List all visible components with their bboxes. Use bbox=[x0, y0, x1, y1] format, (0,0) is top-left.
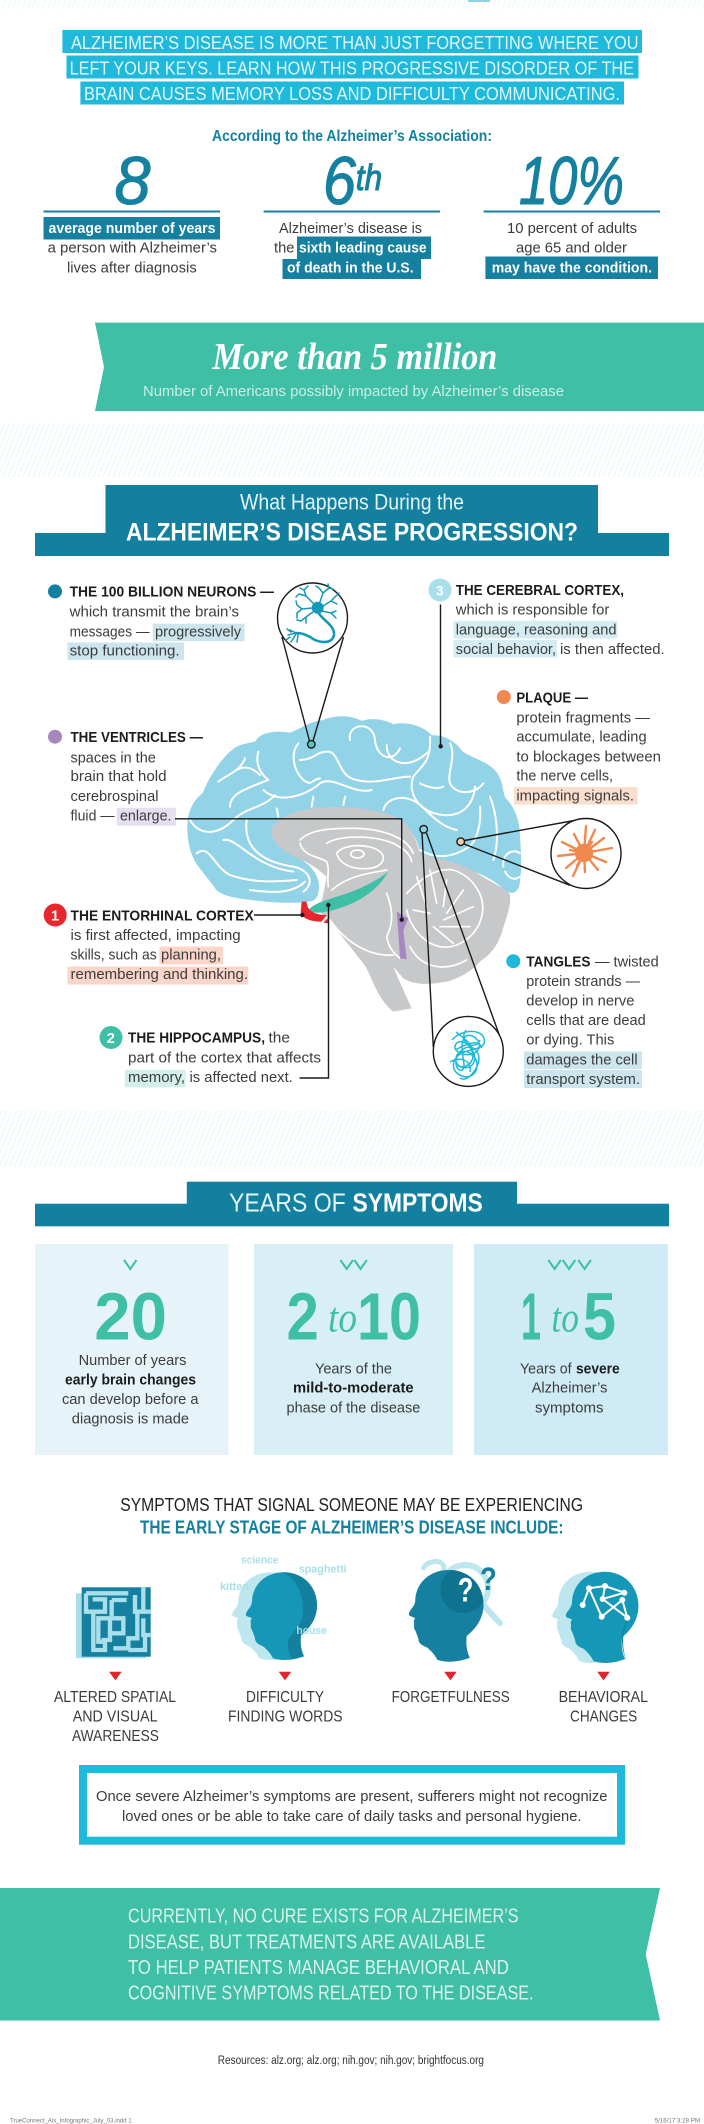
card: 1 to 5 years: symptoms bbox=[535, 1399, 604, 1416]
callout: neurons bbox=[48, 584, 274, 660]
stat: 10 percent: 10% bbox=[519, 143, 624, 219]
callout: cerebral cortex: 3 bbox=[436, 584, 444, 598]
callout: tangles: TANGLES bbox=[526, 954, 590, 970]
brain illustration bbox=[188, 717, 521, 1012]
callout: hippocampus: is affected next. bbox=[190, 1069, 293, 1086]
stat: 8 years: average number of years bbox=[48, 220, 216, 237]
callout: neurons: THE 100 BILLION NEURONS — bbox=[70, 584, 274, 601]
callout: hippocampus: the bbox=[268, 1030, 290, 1046]
callout: hippocampus: 2 bbox=[107, 1031, 115, 1047]
callout: entorhinal cortex bbox=[44, 904, 304, 984]
callout: plaque: protein fragments — bbox=[516, 709, 650, 726]
callout box: severe symptoms: loved ones or be able to take care of daily tasks and personal hygiene. bbox=[122, 1808, 582, 1825]
stat: 6th leading cause: 6 bbox=[323, 143, 361, 219]
callout: entorhinal cortex: planning, bbox=[161, 947, 221, 964]
icon: head with words: science bbox=[241, 1554, 278, 1566]
callout: plaque bbox=[497, 689, 661, 804]
stat: 6th leading cause: of death in the U.S. bbox=[287, 259, 414, 276]
symptom labels with red markers: AWARENESS bbox=[72, 1728, 159, 1745]
magnifier: neuron bbox=[278, 583, 348, 748]
icon: head with words bbox=[220, 1554, 347, 1660]
card: 2 to 10 years: mild-to-moderate bbox=[293, 1380, 414, 1397]
heading: years of symptoms: SYMPTOMS bbox=[352, 1190, 483, 1218]
heading: years of symptoms bbox=[35, 1182, 669, 1226]
callout: tangles: or dying. This bbox=[526, 1032, 614, 1048]
stat: 8 years: lives after diagnosis bbox=[67, 259, 197, 276]
intro text block bbox=[62, 30, 642, 104]
intro text block: ALZHEIMER’S DISEASE IS MORE THAN JUST FORGETTING WHERE YOU bbox=[71, 32, 638, 53]
stat: 6th leading cause bbox=[264, 143, 440, 279]
stat: 10 percent bbox=[484, 143, 660, 279]
severity chevrons bbox=[548, 1260, 591, 1269]
icon: head with question marks: ? bbox=[458, 1572, 473, 1610]
heading: early stage symptoms bbox=[120, 1495, 583, 1537]
callout: entorhinal cortex: 1 bbox=[51, 908, 59, 924]
heading: years of symptoms: YEARS OF bbox=[229, 1190, 346, 1218]
banner: no cure: TO HELP PATIENTS MANAGE BEHAVIORAL AND bbox=[128, 1957, 509, 1979]
stat: 6th leading cause: Alzheimer’s disease is bbox=[279, 220, 422, 237]
symptom labels with red markers: DIFFICULTY bbox=[246, 1689, 324, 1706]
banner: more than 5 million: More than 5 million bbox=[211, 336, 497, 378]
stat: 6th leading cause: the bbox=[274, 240, 294, 257]
banner: more than 5 million: Number of Americans possibly impacted by Alzheimer’s disease bbox=[143, 383, 564, 400]
callout box: severe symptoms: Once severe Alzheimer’s symptoms are present, sufferers might not recognize bbox=[96, 1788, 608, 1805]
callout: cerebral cortex bbox=[428, 578, 665, 748]
symptom labels with red markers: AND VISUAL bbox=[73, 1708, 158, 1726]
callout: neurons: progressively bbox=[155, 623, 241, 640]
icon: head with words: spaghetti bbox=[299, 1563, 347, 1575]
callout: tangles: damages the cell bbox=[526, 1052, 638, 1068]
callout: hippocampus bbox=[100, 903, 330, 1087]
symptom labels with red markers bbox=[54, 1672, 648, 1745]
stat: 6th leading cause: sixth leading cause bbox=[299, 240, 427, 257]
intro text block: LEFT YOUR KEYS. LEARN HOW THIS PROGRESSIVE DISORDER OF THE bbox=[70, 58, 634, 78]
resources line: Resources: alz.org; alz.org; nih.gov; nih.gov; brightfocus.org bbox=[218, 2055, 484, 2067]
callout: cerebral cortex: social behavior, bbox=[456, 641, 556, 658]
callout: plaque: to blockages between bbox=[516, 749, 661, 766]
callout: entorhinal cortex: skills, such as bbox=[70, 947, 157, 964]
callout: entorhinal cortex: THE ENTORHINAL CORTEX bbox=[70, 907, 254, 924]
card: 20 years: Number of years bbox=[79, 1352, 186, 1369]
callout: cerebral cortex: is then affected. bbox=[560, 641, 665, 658]
callout: neurons: stop functioning. bbox=[70, 642, 180, 660]
callout: tangles: develop in nerve bbox=[526, 993, 634, 1010]
callout: plaque: accumulate, leading bbox=[516, 729, 647, 746]
cerebellum and brain stem bbox=[270, 806, 510, 1012]
card: 1 to 5 years: severe bbox=[576, 1360, 620, 1377]
stat: 10 percent: 10 percent of adults bbox=[507, 220, 637, 237]
stat: 10 percent: age 65 and older bbox=[516, 240, 627, 257]
subheading: according to the association: According to the Alzheimer’s Association: bbox=[212, 128, 492, 145]
callout: ventricles: spaces in the bbox=[70, 749, 156, 766]
callout: plaque: PLAQUE — bbox=[516, 689, 588, 706]
callout: plaque: impacting signals. bbox=[516, 787, 634, 804]
callout: hippocampus: part of the cortex that affects bbox=[128, 1049, 321, 1066]
banner: no cure: DISEASE, BUT TREATMENTS ARE AVAILABLE bbox=[128, 1932, 485, 1954]
card: 1 to 5 years: to bbox=[551, 1296, 579, 1342]
card: 1 to 5 years: 1 bbox=[521, 1279, 541, 1354]
magnifier: tangles bbox=[420, 826, 503, 1086]
card: 20 years: early brain changes bbox=[65, 1371, 196, 1388]
stat: 10 percent: may have the condition. bbox=[492, 259, 652, 276]
severity chevrons bbox=[340, 1260, 367, 1269]
stat: 8 years: a person with Alzheimer’s bbox=[48, 240, 217, 257]
callout: hippocampus: memory, bbox=[128, 1069, 185, 1086]
symptom labels with red markers: ALTERED SPATIAL bbox=[54, 1689, 176, 1706]
banner: no cure: COGNITIVE SYMPTOMS RELATED TO THE DISEASE. bbox=[128, 1982, 534, 2004]
intro text block: BRAIN CAUSES MEMORY LOSS AND DIFFICULTY COMMUNICATING. bbox=[84, 83, 620, 104]
callout box: severe symptoms bbox=[83, 1769, 621, 1841]
heading: disease progression: What Happens During the bbox=[240, 489, 464, 514]
callout: ventricles: enlarge. bbox=[120, 807, 172, 824]
stat: 8 years bbox=[44, 143, 220, 276]
card: 2 to 10 years bbox=[254, 1244, 453, 1455]
callout: tangles: — twisted bbox=[595, 954, 659, 970]
hippocampus highlight bbox=[308, 872, 388, 913]
card: 2 to 10 years: 2 bbox=[286, 1279, 319, 1354]
callout: entorhinal cortex: is first affected, impacting bbox=[70, 927, 241, 944]
callout: tangles: cells that are dead bbox=[526, 1012, 646, 1029]
heading: early stage symptoms: THE EARLY STAGE OF ALZHEIMER’S DISEASE INCLUDE: bbox=[140, 1517, 564, 1537]
callout: ventricles: fluid — bbox=[70, 807, 114, 824]
card: 1 to 5 years: Years of bbox=[520, 1360, 572, 1377]
card: 1 to 5 years: 5 bbox=[583, 1279, 616, 1354]
callout: ventricles: cerebrospinal bbox=[70, 788, 158, 805]
ventricle highlight bbox=[397, 912, 408, 959]
card: 1 to 5 years: Alzheimer’s bbox=[532, 1380, 608, 1397]
stat: 8 years: 8 bbox=[114, 143, 151, 219]
card: 2 to 10 years: 10 bbox=[357, 1279, 421, 1354]
callout: tangles bbox=[506, 954, 659, 1088]
magnifier: plaque bbox=[457, 818, 621, 888]
card: 2 to 10 years: Years of the bbox=[315, 1360, 392, 1377]
callout: entorhinal cortex: remembering and thinking. bbox=[70, 966, 248, 983]
card: 20 years: diagnosis is made bbox=[72, 1410, 189, 1427]
callout: tangles: protein strands — bbox=[526, 973, 640, 990]
callout: hippocampus: THE HIPPOCAMPUS, bbox=[128, 1030, 265, 1046]
symptom labels with red markers: FORGETFULNESS bbox=[392, 1689, 510, 1706]
symptom labels with red markers: FINDING WORDS bbox=[228, 1708, 343, 1726]
cerebrum lobes bbox=[188, 717, 521, 902]
banner: more than 5 million bbox=[95, 323, 704, 411]
callout: plaque: the nerve cells, bbox=[516, 767, 613, 784]
card: 2 to 10 years: to bbox=[328, 1296, 357, 1342]
icon: head with words: kitten bbox=[220, 1581, 249, 1593]
heading: disease progression bbox=[35, 485, 669, 556]
card: 20 years: can develop before a bbox=[62, 1391, 199, 1408]
entorhinal cortex highlight bbox=[301, 902, 328, 923]
stat: 6th leading cause: th bbox=[356, 157, 382, 198]
banner: no cure: CURRENTLY, NO CURE EXISTS FOR ALZHEIMER’S bbox=[128, 1906, 519, 1928]
icon: maze bbox=[76, 1587, 151, 1658]
callout: ventricles bbox=[48, 729, 404, 922]
icon: head with question marks bbox=[409, 1561, 500, 1662]
callout: cerebral cortex: language, reasoning and bbox=[456, 621, 616, 638]
card: 20 years: 20 bbox=[94, 1279, 167, 1354]
card: 20 years bbox=[35, 1244, 229, 1455]
card: 2 to 10 years: phase of the disease bbox=[286, 1399, 420, 1416]
callout: neurons: messages — bbox=[70, 623, 150, 640]
callout: tangles: transport system. bbox=[526, 1071, 640, 1088]
callout: ventricles: brain that hold bbox=[70, 768, 167, 785]
symptom labels with red markers: BEHAVIORAL bbox=[559, 1689, 648, 1706]
callout: cerebral cortex: which is responsible for bbox=[455, 602, 609, 619]
heading: disease progression: ALZHEIMER’S DISEASE PROGRESSION? bbox=[126, 518, 578, 546]
icon: head with words: house bbox=[296, 1625, 327, 1637]
card: 1 to 5 years bbox=[474, 1244, 668, 1455]
callout: ventricles: THE VENTRICLES — bbox=[70, 729, 203, 746]
banner: no cure bbox=[0, 1888, 660, 2020]
severity chevron bbox=[124, 1260, 136, 1269]
callout: neurons: which transmit the brain’s bbox=[69, 603, 239, 620]
callout: cerebral cortex: THE CEREBRAL CORTEX, bbox=[456, 582, 624, 599]
icon: head with question marks: ? bbox=[480, 1561, 497, 1597]
icon: head with network bbox=[552, 1572, 638, 1663]
heading: early stage symptoms: SYMPTOMS THAT SIGNAL SOMEONE MAY BE EXPERIENCING bbox=[120, 1495, 583, 1515]
symptom labels with red markers: CHANGES bbox=[570, 1708, 637, 1726]
